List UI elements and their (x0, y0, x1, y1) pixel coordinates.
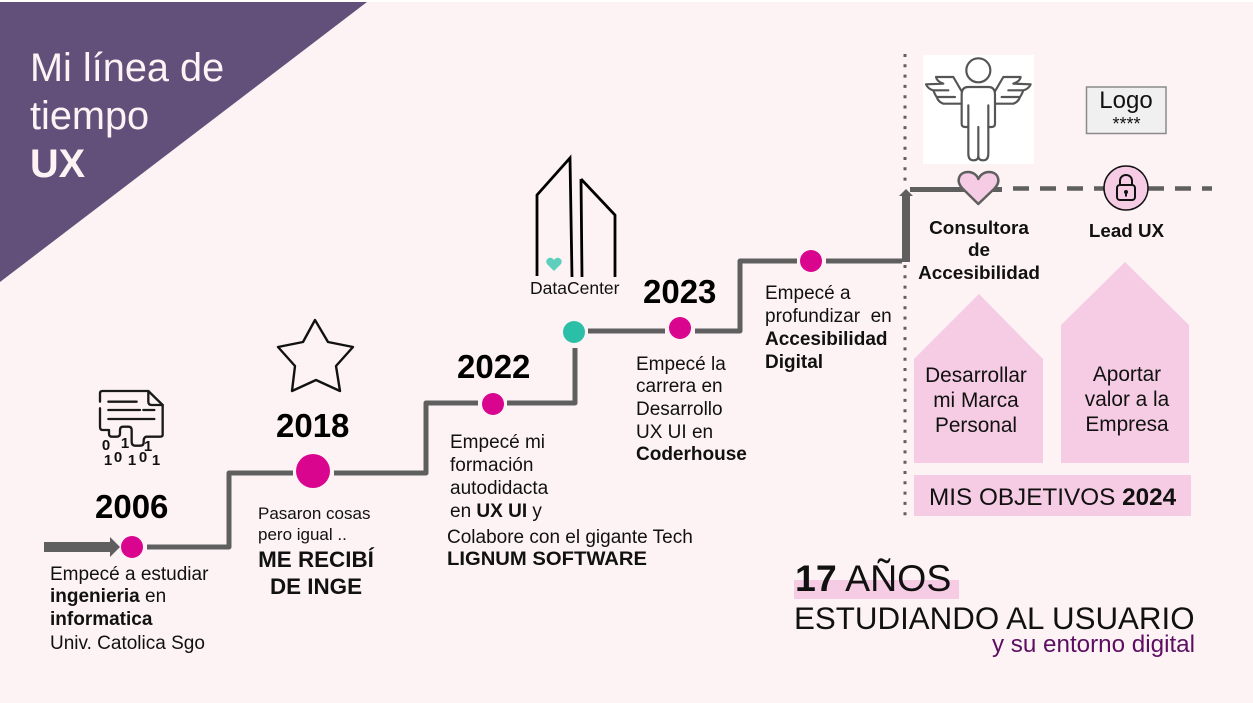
description: Univ. Catolica Sgo (50, 633, 205, 654)
label: DataCenter (530, 278, 620, 298)
icon: lock (1104, 166, 1148, 210)
objective: aportar valor: Aportar (1093, 363, 1161, 386)
description: Empecé la (636, 354, 726, 375)
binary digits: 1 (152, 452, 160, 469)
binary digits: 1 (128, 452, 136, 469)
description: en UX UI y (450, 501, 542, 522)
binary digits: 0 (139, 449, 147, 466)
year: 2023 (643, 273, 716, 310)
milestone: 2023 (636, 273, 747, 465)
binary digits: 0 (114, 449, 122, 466)
description: Empecé a (765, 283, 851, 304)
arrow: timeline up (899, 189, 913, 196)
summary: 17 años: ESTUDIANDO AL USUARIO (794, 601, 1195, 636)
objective: marca personal: Personal (935, 414, 1017, 437)
description: profundizar en (765, 306, 892, 327)
dot (121, 536, 143, 558)
binary digits (102, 435, 160, 469)
highlight: DE INGE (270, 574, 362, 599)
title: UX (30, 142, 86, 186)
icon: binary document (100, 391, 163, 446)
milestone: accesibilidad (765, 250, 892, 373)
objective: aportar valor: valor a la (1085, 388, 1170, 411)
icon: teal heart (546, 258, 562, 271)
description (50, 564, 209, 654)
description: ingenieria en (50, 586, 166, 607)
description: LIGNUM SOFTWARE (447, 548, 647, 570)
title: tiempo (30, 94, 149, 138)
highlight (258, 547, 375, 599)
icon: star (278, 320, 353, 391)
objective: marca personal: Desarrollar (925, 364, 1027, 387)
objective: aportar valor (1061, 262, 1189, 463)
arrow: timeline start (44, 537, 120, 557)
description (636, 354, 747, 465)
description: informatica (50, 609, 153, 630)
description: Colabore con el gigante Tech (447, 527, 693, 548)
description: Empecé mi (450, 432, 545, 453)
label: Consultora de Accesibilidad: Accesibilidad (918, 263, 1040, 284)
icon: winged person (923, 55, 1034, 164)
year: 2022 (457, 348, 530, 385)
binary digits: 1 (121, 435, 129, 452)
dot (800, 250, 822, 272)
description: formación (450, 455, 533, 476)
description: UX UI en (636, 422, 713, 443)
summary: 17 años (794, 557, 1195, 658)
label: Lead UX: Lead UX (1089, 220, 1165, 241)
dot (669, 317, 691, 339)
logo box: Logo (1099, 87, 1153, 114)
heading: mis objetivos 2024: MIS OBJETIVOS 2024 (929, 484, 1177, 511)
label: Consultora de Accesibilidad: Consultora (929, 218, 1029, 239)
description: Digital (765, 352, 823, 373)
description: Accesibilidad (765, 329, 888, 350)
milestone: 2022 (447, 348, 693, 570)
description: Desarrollo (636, 399, 723, 420)
description: Coderhouse (636, 444, 747, 465)
milestone: 2006 (50, 391, 209, 654)
dotted divider (904, 54, 906, 182)
description: Pasaron cosas (258, 504, 370, 523)
dot (296, 454, 330, 488)
objective: marca personal (914, 294, 1043, 463)
binary digits: 0 (102, 437, 110, 454)
logo box (1086, 87, 1166, 134)
label: Consultora de Accesibilidad (918, 218, 1040, 284)
binary digits: 1 (104, 452, 112, 469)
teal dot (563, 321, 585, 343)
description: pero igual .. (258, 525, 347, 544)
icon: heart (959, 172, 998, 204)
title: Mi línea de (30, 46, 224, 90)
binary digits: 1 (144, 438, 152, 455)
label: Consultora de Accesibilidad: de (968, 240, 990, 261)
timeline path (147, 188, 1212, 547)
objective: aportar valor: Empresa (1085, 413, 1169, 436)
description: autodidacta (450, 478, 549, 499)
description (447, 432, 693, 570)
logo box: **** (1112, 114, 1141, 134)
summary: 17 años: y su entorno digital (992, 631, 1195, 658)
panel: title triangle (0, 2, 367, 282)
description (765, 283, 892, 373)
summary: 17 años: 17 AÑOS (795, 557, 951, 599)
description (258, 504, 370, 544)
dot (482, 393, 504, 415)
description: Empecé a estudiar (50, 564, 209, 585)
year: 2018 (276, 407, 349, 444)
title (30, 46, 224, 186)
highlight: ME RECIBÍ (258, 547, 375, 572)
objective: marca personal: mi Marca (933, 389, 1019, 412)
milestone: 2018 (258, 320, 375, 599)
description: carrera en (636, 376, 723, 397)
icon: DataCenter buildings (530, 158, 620, 298)
year: 2006 (95, 488, 168, 525)
heading: mis objetivos 2024 (914, 475, 1191, 516)
